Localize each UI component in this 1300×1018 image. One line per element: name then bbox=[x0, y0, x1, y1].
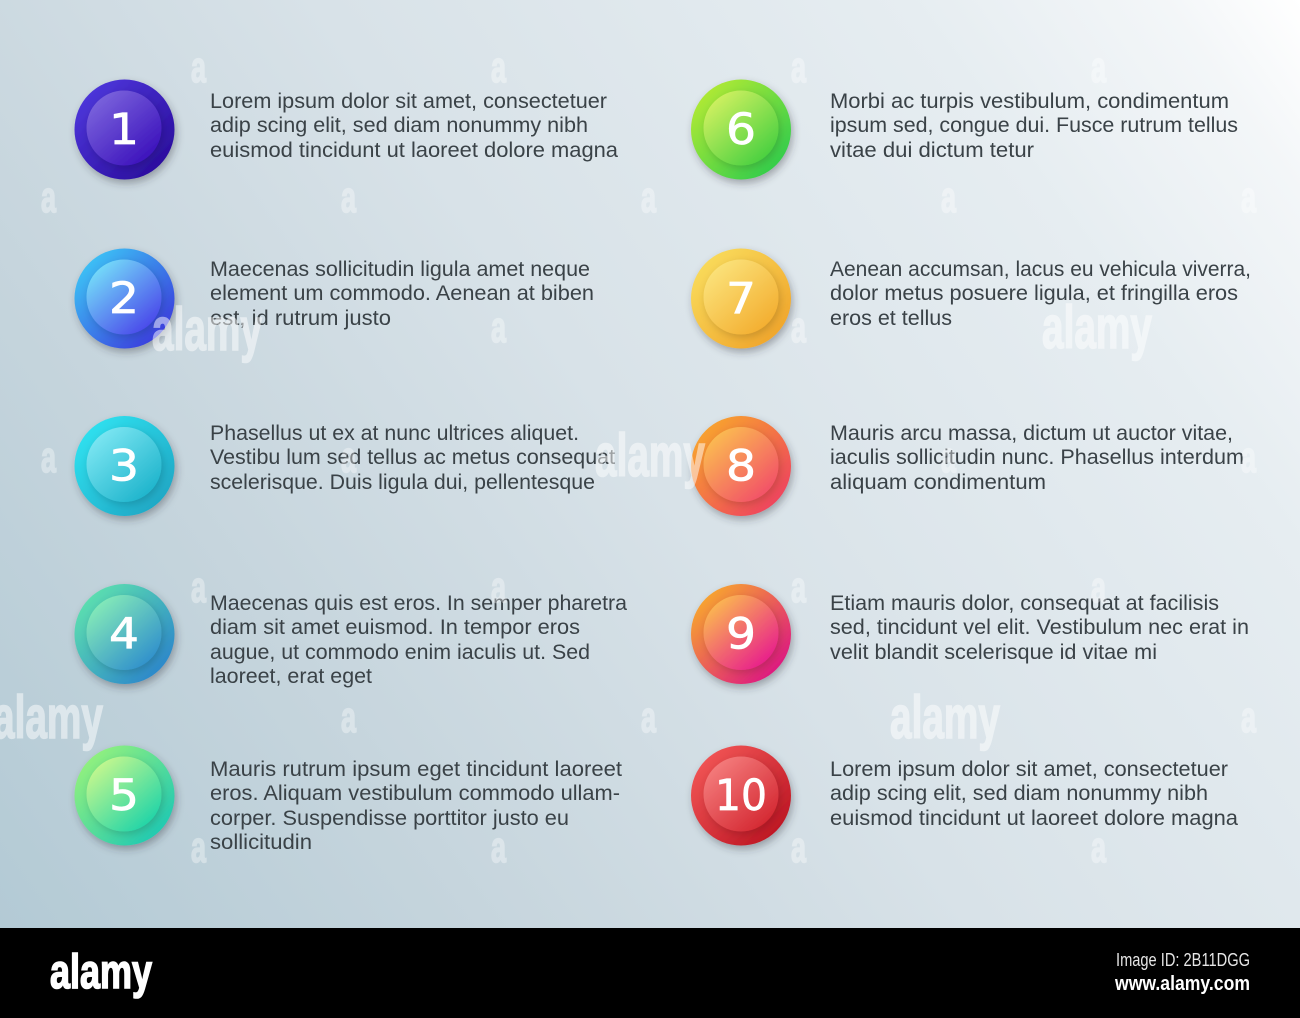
button 4 bbox=[74, 584, 174, 684]
watermarks: a bbox=[191, 823, 206, 872]
text block 3: Phasellus ut ex at nunc ultrices aliquet. bbox=[210, 421, 579, 445]
text block 4: diam sit amet euismod. In tempor eros bbox=[210, 615, 580, 639]
watermarks: a bbox=[341, 173, 356, 222]
text block 4: augue, ut commodo enim iaculis ut. Sed bbox=[210, 640, 590, 664]
text block 2: element um commodo. Aenean at biben bbox=[210, 281, 594, 305]
button 4: 4 bbox=[109, 610, 139, 660]
button 3 bbox=[74, 416, 174, 516]
watermarks: a bbox=[791, 303, 806, 352]
watermarks: a bbox=[1241, 173, 1256, 222]
text block 3: scelerisque. Duis ligula dui, pellentesque bbox=[210, 470, 595, 494]
watermarks: a bbox=[1241, 433, 1256, 482]
watermarks: alamy bbox=[1042, 294, 1152, 361]
watermarks: a bbox=[641, 173, 656, 222]
footer url: www.alamy.com bbox=[1114, 973, 1250, 995]
button 6 bbox=[691, 80, 791, 180]
text block 2 bbox=[210, 257, 594, 330]
text block 9: sed, tincidunt vel elit. Vestibulum nec erat in bbox=[830, 615, 1249, 639]
watermarks: a bbox=[791, 43, 806, 92]
watermarks: a bbox=[941, 433, 956, 482]
watermarks: a bbox=[491, 303, 506, 352]
text block 10 bbox=[830, 757, 1238, 830]
text block 10: Lorem ipsum dolor sit amet, consectetuer bbox=[830, 757, 1228, 781]
text block 8: iaculis sollicitudin nunc. Phasellus interdum bbox=[830, 445, 1244, 469]
watermarks: a bbox=[1091, 563, 1106, 612]
button 8 bbox=[691, 416, 791, 516]
button 7: 7 bbox=[726, 274, 756, 324]
watermarks: alamy bbox=[890, 684, 1000, 751]
watermarks: a bbox=[41, 433, 56, 482]
button 2 bbox=[74, 248, 174, 348]
text block 9: velit blandit scelerisque id vitae mi bbox=[830, 640, 1157, 664]
button 9 bbox=[691, 584, 791, 684]
text block 3: Vestibu lum sed tellus ac metus consequat bbox=[210, 445, 615, 469]
text block 5: Mauris rutrum ipsum eget tincidunt laoreet bbox=[210, 757, 622, 781]
button 1 bbox=[74, 80, 174, 180]
text block 6: vitae dui dictum tetur bbox=[830, 138, 1034, 162]
text block 10: euismod tincidunt ut laoreet dolore magna bbox=[830, 806, 1238, 830]
button 3: 3 bbox=[109, 442, 139, 492]
watermarks: alamy bbox=[152, 296, 262, 363]
watermarks: a bbox=[641, 693, 656, 742]
watermarks: a bbox=[341, 693, 356, 742]
footer bar bbox=[0, 928, 1300, 1018]
text block 7: Aenean accumsan, lacus eu vehicula viverra, bbox=[830, 257, 1251, 281]
text block 1: adip scing elit, sed diam nonummy nibh bbox=[210, 113, 588, 137]
text block 7 bbox=[830, 257, 1251, 330]
button 7 bbox=[691, 248, 791, 348]
watermarks: alamy bbox=[595, 422, 705, 489]
text block 4 bbox=[210, 591, 627, 688]
text block 5 bbox=[210, 757, 622, 854]
text block 5: corper. Suspendisse porttitor justo eu bbox=[210, 806, 569, 830]
button 10: 10 bbox=[715, 771, 767, 821]
text block 2: est, id rutrum justo bbox=[210, 306, 391, 330]
watermarks: a bbox=[1091, 43, 1106, 92]
text block 4: Maecenas quis est eros. In semper pharetra bbox=[210, 591, 627, 615]
text block 5: eros. Aliquam vestibulum commodo ullam- bbox=[210, 781, 620, 805]
text block 4: laoreet, erat eget bbox=[210, 664, 372, 688]
watermarks: a bbox=[1091, 823, 1106, 872]
watermarks bbox=[0, 43, 1256, 872]
button 9: 9 bbox=[726, 610, 756, 660]
watermarks: a bbox=[491, 563, 506, 612]
watermarks: a bbox=[41, 173, 56, 222]
button 2: 2 bbox=[109, 274, 139, 324]
text block 3 bbox=[210, 421, 615, 494]
text block 7: dolor metus posuere ligula, et fringilla eros bbox=[830, 281, 1238, 305]
text block 2: Maecenas sollicitudin ligula amet neque bbox=[210, 257, 590, 281]
button 10 bbox=[691, 746, 791, 846]
watermarks: a bbox=[491, 823, 506, 872]
watermarks: a bbox=[941, 173, 956, 222]
footer logo: alamy bbox=[50, 946, 152, 999]
text block 8 bbox=[830, 421, 1244, 494]
watermarks: a bbox=[341, 433, 356, 482]
text block 8: Mauris arcu massa, dictum ut auctor vitae, bbox=[830, 421, 1233, 445]
watermarks: a bbox=[191, 43, 206, 92]
text block 6 bbox=[830, 89, 1238, 162]
text block 9 bbox=[830, 591, 1249, 664]
button 1: 1 bbox=[109, 105, 139, 155]
watermarks: a bbox=[791, 823, 806, 872]
text block 1: euismod tincidunt ut laoreet dolore magna bbox=[210, 138, 618, 162]
text block 1 bbox=[210, 89, 618, 162]
text block 6: Morbi ac turpis vestibulum, condimentum bbox=[830, 89, 1229, 113]
text block 5: sollicitudin bbox=[210, 830, 312, 854]
text block 6: ipsum sed, congue dui. Fusce rutrum tellus bbox=[830, 113, 1238, 137]
watermarks: a bbox=[791, 563, 806, 612]
watermarks: a bbox=[191, 563, 206, 612]
text block 9: Etiam mauris dolor, consequat at facilisis bbox=[830, 591, 1219, 615]
footer image id: Image ID: 2B11DGG bbox=[1116, 950, 1250, 970]
button 5: 5 bbox=[109, 771, 139, 821]
watermarks: a bbox=[491, 43, 506, 92]
text block 10: adip scing elit, sed diam nonummy nibh bbox=[830, 781, 1208, 805]
text block 1: Lorem ipsum dolor sit amet, consectetuer bbox=[210, 89, 607, 113]
button 5 bbox=[74, 746, 174, 846]
text block 8: aliquam condimentum bbox=[830, 470, 1046, 494]
text block 7: eros et tellus bbox=[830, 306, 952, 330]
button 6: 6 bbox=[726, 105, 756, 155]
button 8: 8 bbox=[726, 442, 756, 492]
watermarks: a bbox=[1241, 693, 1256, 742]
